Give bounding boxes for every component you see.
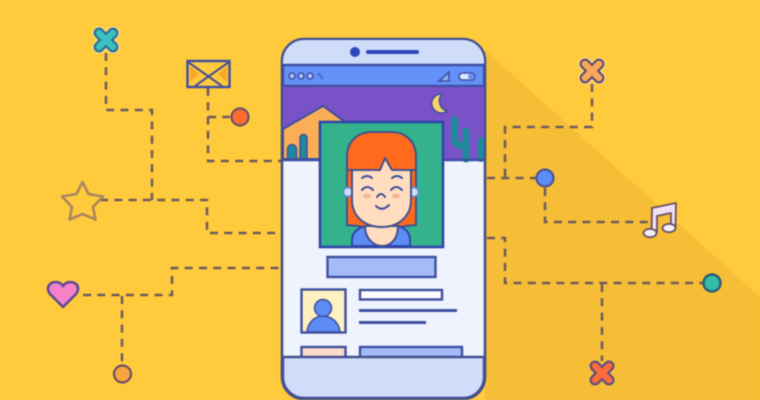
icon: blue dot: [536, 170, 554, 186]
icon: teal cross: [99, 33, 113, 47]
phone shadow: [485, 50, 760, 400]
small cacti: [288, 144, 296, 159]
text lines: [359, 290, 457, 324]
icon: envelope: [188, 61, 230, 87]
connector lines right: [487, 84, 703, 361]
large cactus: [454, 120, 466, 159]
ears: [344, 188, 352, 196]
icon: heart: [48, 282, 78, 307]
hair fringe: [347, 132, 416, 170]
phone top bezel: [283, 40, 484, 65]
icon: music note: [644, 203, 676, 237]
icon: orange cross: [595, 366, 609, 380]
icon: peach dot: [114, 366, 131, 382]
connector lines left: [83, 53, 281, 365]
name button: [328, 257, 436, 277]
neck: [365, 226, 398, 246]
icon: teal dot: [704, 274, 720, 292]
night scene: [283, 87, 484, 160]
cards cut off by footer: [302, 347, 462, 359]
hair back: [347, 165, 416, 232]
phone footer: [283, 357, 484, 398]
phone: [282, 39, 485, 399]
status bar: [283, 65, 484, 86]
phone body: [282, 39, 485, 399]
facial features: [362, 176, 402, 209]
house: [283, 106, 345, 159]
shirt: [352, 226, 410, 246]
avatar thumbnail: [302, 290, 346, 332]
face: [352, 150, 411, 227]
icon: peach cross: [585, 64, 599, 78]
moon: [432, 94, 447, 113]
icon: star: [62, 182, 103, 220]
profile photo: [320, 122, 443, 247]
icon: orange dot: [232, 108, 248, 126]
